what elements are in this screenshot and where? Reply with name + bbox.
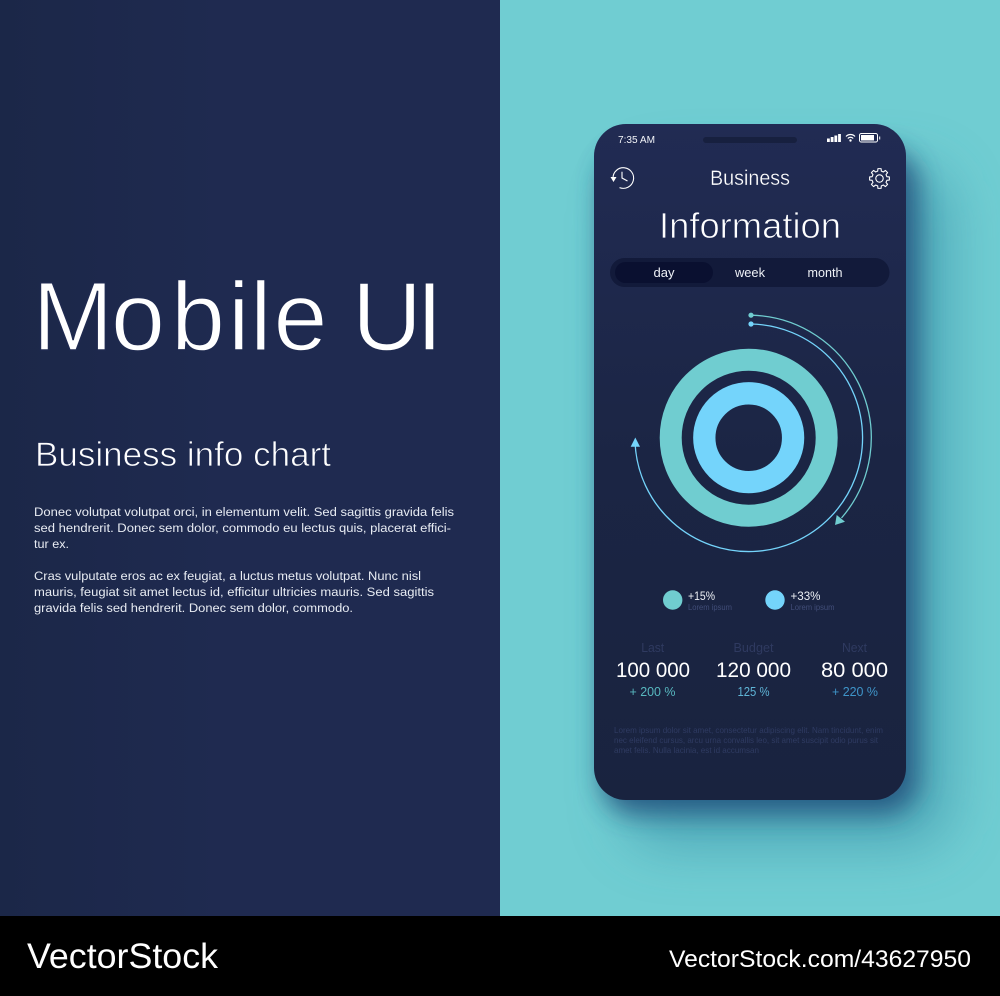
footer bar — [0, 916, 1000, 996]
teal progress arc — [748, 313, 871, 525]
legend item: blue: +33% — [790, 589, 821, 603]
legend item: teal: Lorem ipsum — [688, 603, 732, 612]
icon: history clock — [610, 168, 634, 188]
panel: left navy background — [0, 0, 500, 916]
text block: first paragraph: tur ex. — [34, 537, 69, 551]
panel: phone — [594, 124, 906, 800]
tab bar — [610, 258, 890, 287]
stat: last: + 200 % — [630, 685, 676, 699]
tab labels — [654, 266, 843, 280]
text block: first paragraph — [34, 505, 454, 551]
footer image id: VectorStock.com/43627950 — [669, 946, 971, 973]
footer brand: VectorStock — [27, 937, 219, 976]
title: Mobile UI — [32, 262, 443, 371]
stat: budget: 120 000 — [716, 659, 791, 682]
tab labels: week — [734, 266, 766, 280]
stat: next: 80 000 — [821, 659, 888, 682]
active tab — [615, 262, 713, 283]
phone notch — [703, 137, 797, 143]
stat: next: Next — [842, 641, 868, 655]
phone tight drop shadow — [602, 150, 918, 814]
heading: Information: Information — [659, 205, 841, 246]
legend item: teal — [663, 589, 732, 612]
blue progress arc — [631, 321, 863, 552]
text block: second paragraph: mauris, feugiat sit amet lectus id, efficitur ultricies mauris. Sed sagittis — [34, 585, 434, 599]
text block: second paragraph: Cras vulputate eros ac ex feugiat, a luctus metus volutpat. Nunc nisl — [34, 569, 421, 583]
stat: budget — [716, 641, 791, 699]
phone wide drop shadow — [625, 170, 950, 845]
status bar time: 7:35 AM — [618, 135, 655, 146]
tab labels: month — [808, 266, 843, 280]
heading: Business: Business — [710, 167, 790, 190]
text block: first paragraph: sed hendrerit. Donec sem dolor, commodo eu lectus quis, placerat effici- — [34, 521, 451, 535]
stat: budget: 125 % — [738, 685, 770, 699]
legend item: blue: Lorem ipsum — [790, 603, 835, 612]
panel: right teal background — [500, 0, 1000, 916]
outer teal ring — [671, 360, 827, 516]
icon: settings gear — [870, 169, 889, 188]
stat: last — [616, 641, 690, 699]
stat: last: 100 000 — [616, 659, 690, 682]
text block: phone footnote: Lorem ipsum dolor sit amet, consectetur adipiscing elit. Nam tincidunt, enim — [614, 725, 883, 735]
stat: budget: Budget — [734, 641, 774, 655]
icon: battery — [860, 134, 880, 142]
tab labels: day — [654, 266, 675, 280]
donut chart — [631, 313, 871, 552]
subtitle: Business info chart — [35, 436, 331, 474]
text block: phone footnote: nec eleifend cursus, arcu urna convallis leo, sit amet suscipit odio purus sit — [614, 735, 879, 745]
stat: next: + 220 % — [832, 685, 878, 699]
inner blue ring — [704, 393, 793, 482]
text block: phone footnote — [614, 725, 883, 755]
icon: wifi — [846, 134, 855, 141]
text block: first paragraph: Donec volutpat volutpat orci, in elementum velit. Sed sagittis gravida felis — [34, 505, 454, 519]
legend item: teal: +15% — [688, 589, 715, 603]
stat: last: Last — [641, 641, 665, 655]
legend item: blue — [765, 589, 835, 612]
stat: next — [821, 641, 888, 699]
text block: phone footnote: amet felis. Nulla lacinia, est id accumsan — [614, 745, 759, 755]
icon: signal bars — [827, 134, 841, 142]
text block: second paragraph — [34, 569, 434, 615]
text block: second paragraph: gravida felis sed hendrerit. Donec sem dolor, commodo. — [34, 601, 353, 615]
